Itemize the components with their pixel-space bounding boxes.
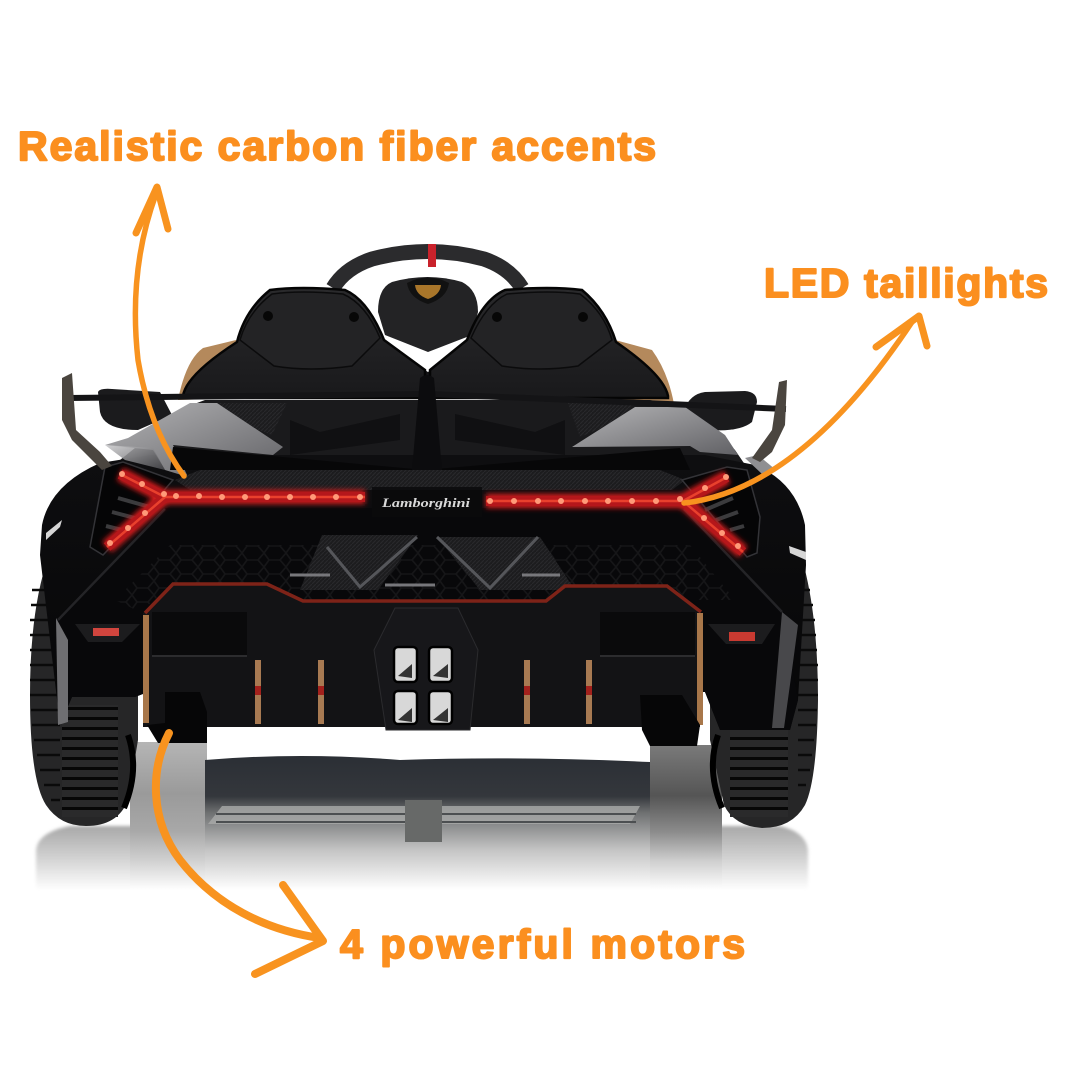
- arrow: carbon fiber accents: [135, 187, 184, 476]
- main body: [40, 455, 806, 730]
- exhaust housing: [374, 608, 478, 730]
- tan cabin edges: [178, 340, 674, 404]
- left seat: [183, 288, 425, 398]
- right seat: [430, 288, 668, 398]
- engine cover louvres: [213, 403, 636, 437]
- motors: [147, 692, 700, 746]
- left tire: [30, 558, 138, 826]
- spoiler: [62, 373, 787, 470]
- carbon band: [175, 470, 685, 490]
- glossy highlight left: [105, 403, 283, 477]
- rear bumper panel: [56, 508, 798, 730]
- centre hub: [375, 277, 480, 398]
- diagonal trim: [58, 509, 782, 620]
- steering wheel: [333, 244, 522, 288]
- rear deck: [105, 400, 750, 472]
- glossy highlight right: [572, 407, 738, 455]
- label: motors: 4 powerful motors: [340, 921, 745, 967]
- right tire: [710, 566, 818, 828]
- arrow: LED taillights: [684, 316, 927, 503]
- side reflectors: [75, 624, 775, 644]
- label: carbon fiber: Realistic carbon fiber accents: [18, 123, 656, 169]
- diffuser blocks: [152, 612, 695, 656]
- car: [30, 244, 818, 828]
- left mirror: [98, 389, 172, 430]
- arrow: motors: [156, 733, 323, 974]
- central V carbon: [290, 535, 575, 590]
- label: LED taillights: LED taillights: [764, 260, 1048, 306]
- diffuser panel: [143, 584, 700, 727]
- brand badge: [372, 490, 482, 517]
- right mirror: [684, 391, 757, 430]
- taillights: [107, 471, 743, 552]
- hex panel: [115, 545, 735, 612]
- deck shadow: [170, 447, 690, 470]
- red diffuser trim: [145, 584, 701, 613]
- floor reflection: [36, 742, 808, 890]
- rear fins: [258, 660, 589, 724]
- brand badge: Lamborghini: [381, 495, 470, 510]
- taillight housings: [90, 462, 760, 557]
- copper side strips: [146, 613, 700, 725]
- side trim: [56, 618, 68, 725]
